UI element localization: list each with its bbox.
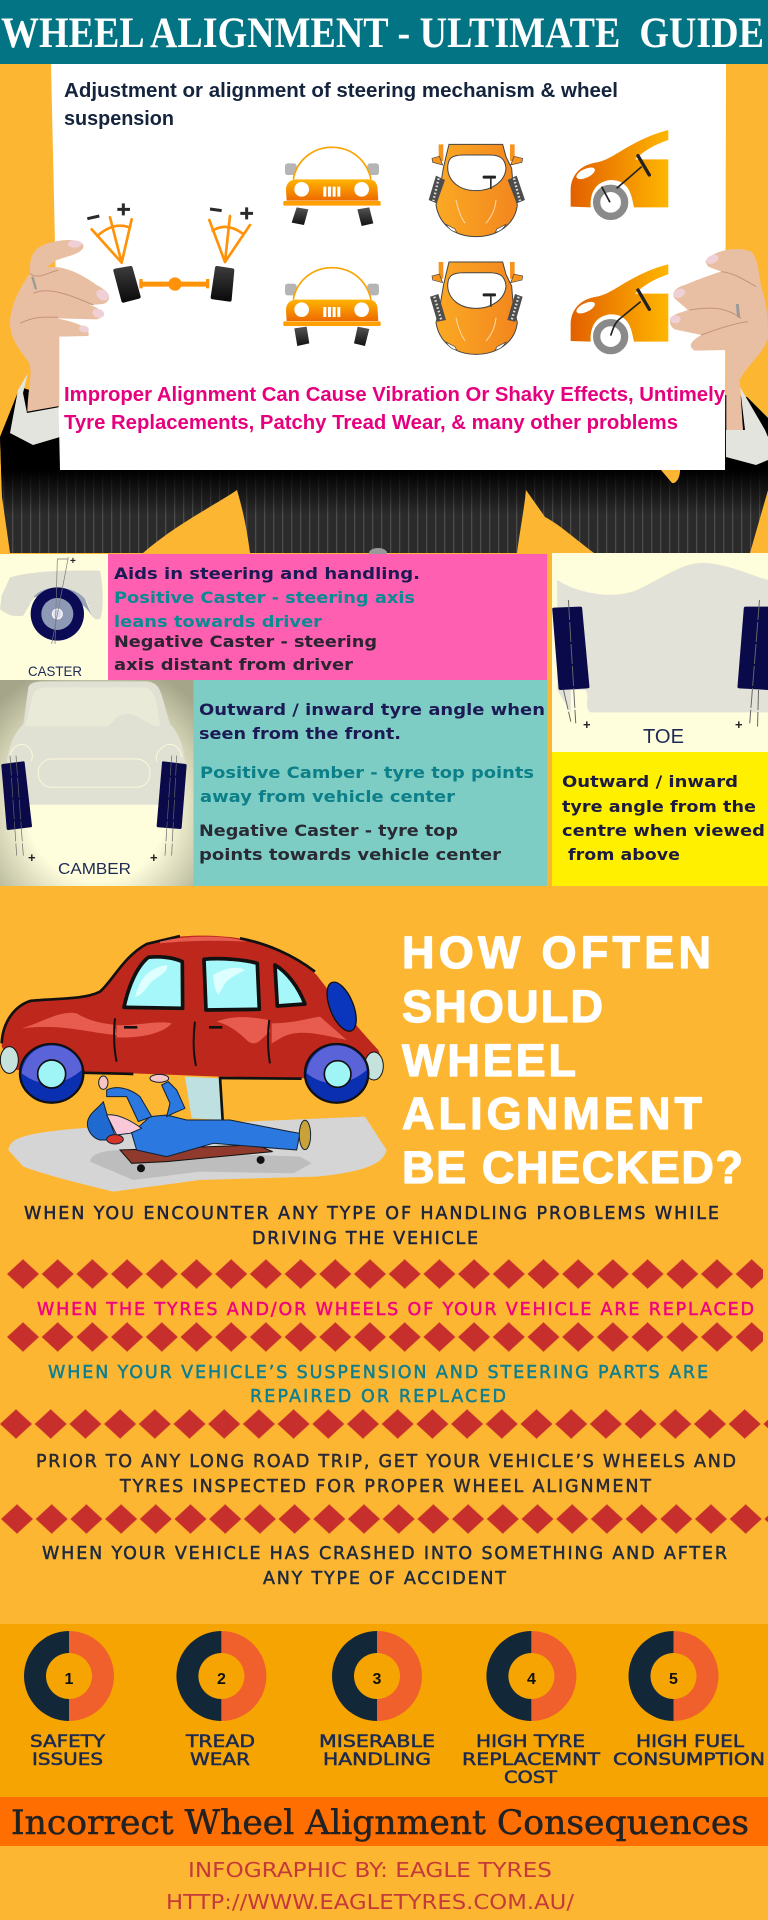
heading: how often: BE CHECKED?: [402, 1142, 743, 1193]
panel: toe description: centre when viewed: [562, 821, 765, 840]
list item 2: WHEN THE TYRES AND/OR WHEELS OF YOUR VEHICLE ARE REPLACED: [37, 1300, 754, 1320]
list item 3: [48, 1363, 708, 1407]
diamond divider 3: [0, 1409, 768, 1439]
panel: caster description: Negative Caster - steering: [114, 632, 377, 651]
sign intro text: suspension: [64, 108, 174, 130]
panel: caster description: Aids in steering and handling.: [114, 564, 420, 583]
panel: camber description: [194, 680, 547, 886]
toe plus signs: +: [583, 717, 591, 732]
caster label: CASTER: [28, 663, 82, 679]
shirt cuffs: [10, 373, 768, 465]
panel: camber description: seen from the front.: [199, 724, 401, 743]
consequence 5: CONSUMPTION: [613, 1750, 765, 1769]
footer credit: [166, 1858, 574, 1914]
consequence 5: HIGH FUEL: [636, 1732, 745, 1751]
list item 4: PRIOR TO ANY LONG ROAD TRIP, GET YOUR VEHICLE’S WHEELS AND: [36, 1452, 736, 1472]
consequence 3: MISERABLE: [319, 1732, 435, 1751]
mechanic: [87, 1074, 311, 1157]
car lamps: [0, 1047, 18, 1073]
list item 3: REPAIRED OR REPLACED: [250, 1387, 506, 1407]
consequence 4: [462, 1631, 601, 1787]
list item 1: DRIVING THE VEHICLE: [252, 1229, 478, 1249]
list item 5: ANY TYPE OF ACCIDENT: [263, 1569, 506, 1589]
sign warning text: Improper Alignment Can Cause Vibration Or Shaky Effects, Untimely: [64, 384, 726, 406]
heading: how often: ALIGNMENT: [402, 1088, 702, 1139]
icon: front car, wheels splayed: [283, 147, 381, 226]
panel: caster description: leans towards driver: [114, 612, 322, 631]
consequence 3: 3: [373, 1671, 382, 1688]
heading: how often: WHEEL: [402, 1035, 576, 1086]
consequence 4: 4: [527, 1671, 536, 1688]
list item 3: WHEN YOUR VEHICLE’S SUSPENSION AND STEERING PARTS ARE: [48, 1363, 708, 1383]
consequence 5: [613, 1631, 765, 1769]
hero: person holding sign: [0, 64, 768, 558]
sign intro text: [64, 80, 618, 130]
creeper wheels: [137, 1156, 265, 1172]
consequence 3: [319, 1631, 435, 1769]
consequence 2: 2: [217, 1671, 226, 1688]
car wheels: [20, 1044, 83, 1103]
panel: toe diagram: +: [735, 717, 743, 732]
panel: consequences band: [0, 1624, 768, 1797]
creeper board: [120, 1145, 273, 1163]
car body: [2, 936, 381, 1078]
panel: caster description: Positive Caster - steering axis: [114, 588, 415, 607]
icon: front car, wheels tucked: [283, 268, 381, 346]
list item 4: TYRES INSPECTED FOR PROPER WHEEL ALIGNMENT: [119, 1477, 651, 1497]
panel: camber diagram: [0, 680, 194, 886]
door handles: [124, 1023, 222, 1031]
car windows: [124, 957, 305, 1010]
diamond divider 4: [1, 1504, 768, 1534]
diamond divider 2: [7, 1322, 763, 1352]
icon: side car fender, second: [571, 264, 668, 351]
business suit: [0, 387, 768, 558]
sign warning text: Tyre Replacements, Patchy Tread Wear, & many other problems: [64, 412, 678, 434]
heading: how often: HOW OFTEN: [402, 927, 711, 978]
white sign board: [51, 64, 726, 470]
sign warning text: [64, 384, 726, 434]
toe label: TOE: [643, 726, 684, 748]
consequence 4: HIGH TYRE: [476, 1732, 585, 1751]
heading: how often: [402, 927, 743, 1193]
consequence 2: [176, 1631, 266, 1769]
list item 1: WHEN YOU ENCOUNTER ANY TYPE OF HANDLING PROBLEMS WHILE: [24, 1204, 719, 1224]
car outline: [2, 936, 315, 1079]
panel: camber description: away from vehicle center: [200, 787, 455, 806]
sign intro text: Adjustment or alignment of steering mechanism & wheel: [64, 80, 618, 102]
list item 1: [24, 1204, 719, 1249]
car window glare: [135, 965, 245, 997]
icon: sports car top view, first: [429, 144, 525, 237]
camber plus signs: +: [28, 850, 36, 865]
consequence 1: [24, 1631, 114, 1769]
panel: caster description: axis distant from driver: [114, 655, 353, 674]
lift post: [185, 1077, 223, 1120]
consequence 5: 5: [669, 1671, 678, 1688]
panel: camber description: Outward / inward tyre angle when: [199, 700, 545, 719]
panel: caster diagram: [0, 554, 108, 680]
consequence 1: ISSUES: [32, 1750, 103, 1769]
icon: side car fender, first: [571, 130, 668, 216]
icon: axle with wheel angle arcs: [87, 203, 253, 301]
illustration: mechanic under car on lift: [0, 936, 387, 1192]
icon: sports car top view, second: [430, 262, 523, 354]
floor shadow: [90, 1150, 312, 1180]
panel: toe description: from above: [568, 845, 680, 864]
left hand: [10, 240, 111, 412]
consequence 4: REPLACEMNT: [462, 1750, 601, 1769]
title banner: [0, 0, 768, 64]
panel: caster description: [108, 554, 547, 680]
panel: toe description: tyre angle from the: [562, 797, 756, 816]
list item 5: WHEN YOUR VEHICLE HAS CRASHED INTO SOMETHING AND AFTER: [42, 1544, 727, 1564]
panel: camber description: points towards vehicle center: [199, 845, 501, 864]
consequence 3: HANDLING: [323, 1750, 431, 1769]
spare wheel: [321, 978, 362, 1035]
panel: toe description: Outward / inward: [562, 772, 738, 791]
car highlights: [22, 937, 347, 1043]
panel: camber description: Positive Camber - tyre top points: [200, 763, 534, 782]
caster plus sign: +: [70, 556, 76, 567]
panel: camber description: Negative Caster - tyre top: [199, 821, 458, 840]
panel: toe diagram: [552, 553, 768, 752]
consequence 1: SAFETY: [30, 1732, 106, 1751]
car door lines: [114, 1018, 270, 1066]
list item 4: [36, 1452, 736, 1497]
consequence 1: 1: [65, 1671, 74, 1688]
diamond divider 1: [7, 1259, 763, 1289]
consequence 4: COST: [504, 1768, 558, 1787]
right hand: [670, 249, 768, 430]
panel: camber diagram: +: [150, 850, 158, 865]
panel: toe description: [552, 752, 768, 886]
footer credit: HTTP://WWW.EAGLETYRES.COM.AU/: [166, 1890, 574, 1914]
consequence 2: TREAD: [185, 1732, 255, 1751]
consequence 2: WEAR: [190, 1750, 250, 1769]
heading band: incorrect wheel alignment consequences: Incorrect Wheel Alignment Consequences: [11, 1803, 749, 1843]
heading: how often: SHOULD: [402, 981, 603, 1032]
camber label: CAMBER: [58, 861, 131, 878]
list item 5: [42, 1544, 727, 1589]
footer credit: INFOGRAPHIC BY: EAGLE TYRES: [188, 1858, 552, 1882]
floor: [8, 1117, 387, 1192]
